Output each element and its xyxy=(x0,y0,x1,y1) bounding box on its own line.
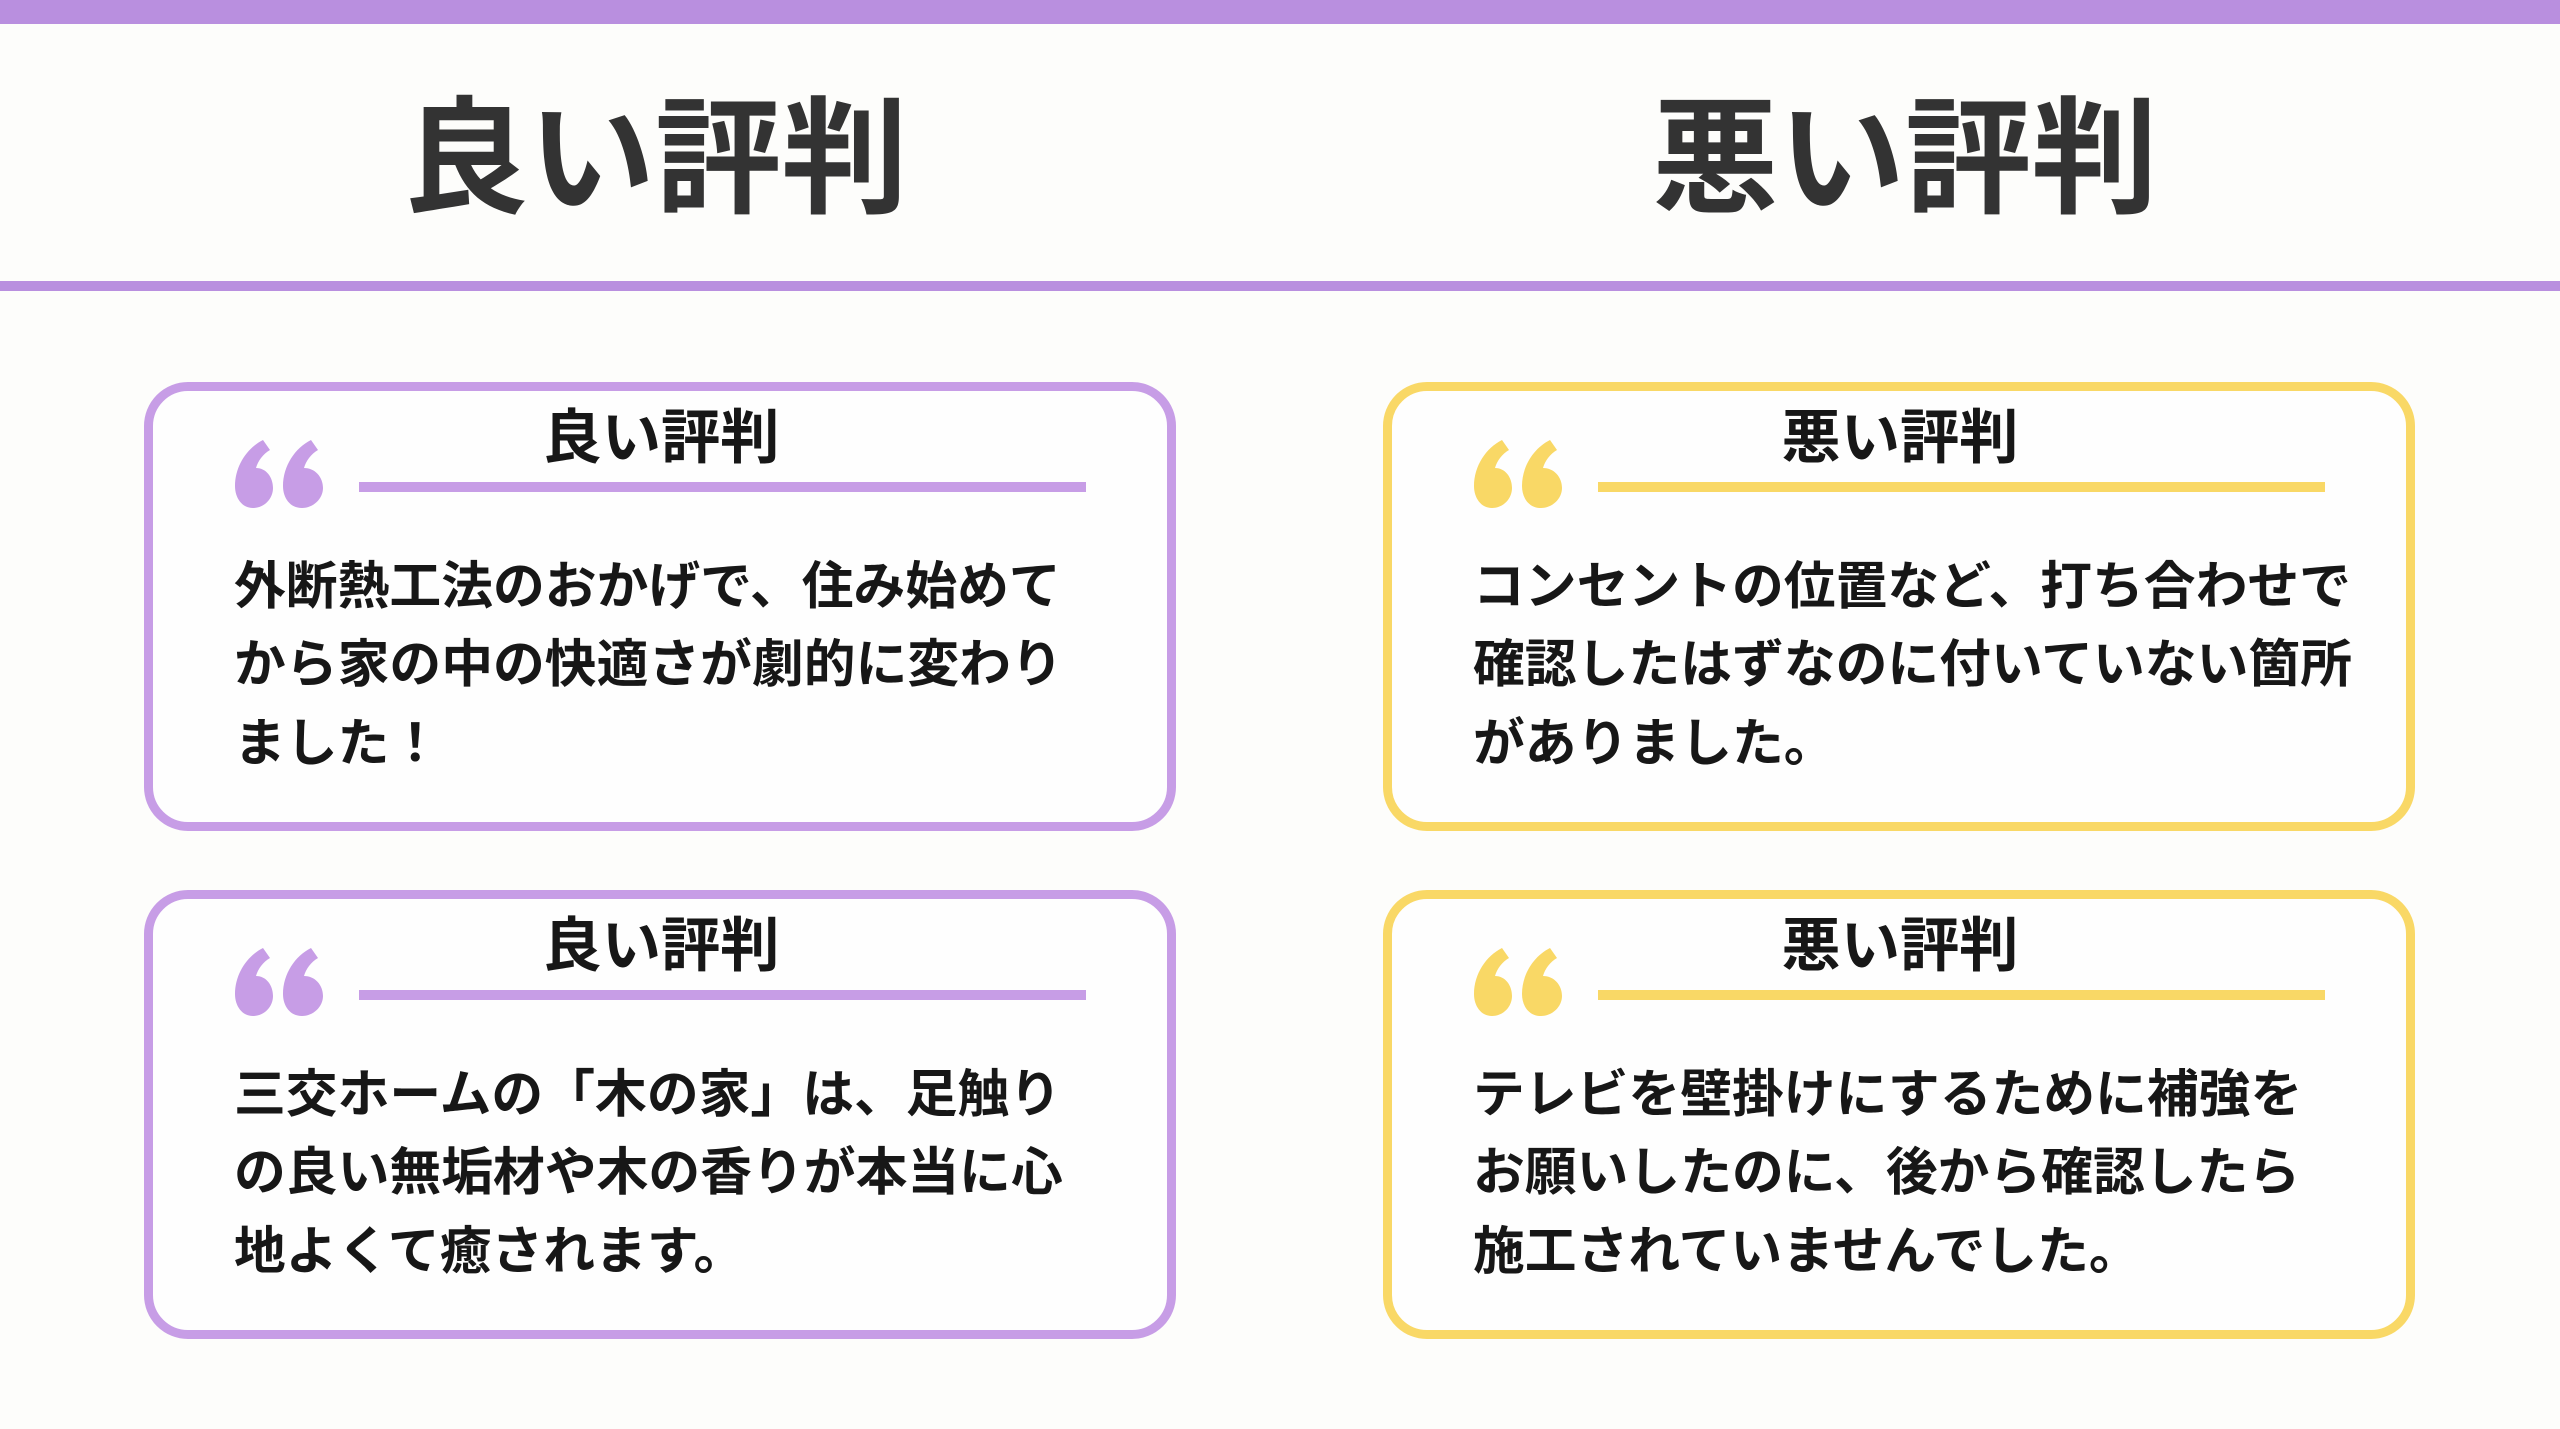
icon: quotation mark xyxy=(235,948,323,1016)
review text: 三交ホームの「木の家」は、足触り xyxy=(234,1065,1061,1123)
review text: 地よくて癒されます。 xyxy=(234,1222,745,1280)
card heading: 悪い評判 xyxy=(1781,404,2019,471)
title: good reviews: 良い評判 xyxy=(402,88,908,230)
icon: quotation mark xyxy=(1474,440,1562,508)
review text: テレビを壁掛けにするために補強を xyxy=(1473,1065,2302,1123)
review text: 施工されていませんでした。 xyxy=(1473,1222,2141,1280)
icon: quotation mark xyxy=(235,440,323,508)
icon: quotation mark xyxy=(1474,948,1562,1016)
heading rule xyxy=(359,990,1086,1000)
card heading: 良い評判 xyxy=(542,912,780,979)
review text xyxy=(1473,557,2352,772)
review text xyxy=(234,557,1063,772)
review text: お願いしたのに、後から確認したら xyxy=(1473,1143,2300,1201)
title: bad reviews: 悪い評判 xyxy=(1652,88,2158,230)
review text: 確認したはずなのに付いていない箇所 xyxy=(1473,635,2352,693)
review text: の良い無垢材や木の香りが本当に心 xyxy=(234,1143,1063,1201)
heading rule xyxy=(359,482,1086,492)
panel: bad review 2 xyxy=(1383,890,2415,1339)
heading rule xyxy=(1598,482,2325,492)
review text: から家の中の快適さが劇的に変わり xyxy=(234,635,1063,693)
review text: コンセントの位置など、打ち合わせで xyxy=(1473,557,2351,615)
header divider xyxy=(0,281,2560,291)
review text: ました！ xyxy=(234,714,441,772)
top bar xyxy=(0,0,2560,24)
heading rule xyxy=(1598,990,2325,1000)
panel: good review 2 xyxy=(144,890,1176,1339)
review text xyxy=(1473,1065,2302,1280)
review text: 外断熱工法のおかげで、住み始めて xyxy=(234,557,1061,615)
review text: がありました。 xyxy=(1473,714,1836,772)
review text xyxy=(234,1065,1063,1280)
card heading: 悪い評判 xyxy=(1781,912,2019,979)
panel: bad review 1 xyxy=(1383,382,2415,831)
panel: good review 1 xyxy=(144,382,1176,831)
card heading: 良い評判 xyxy=(542,404,780,471)
